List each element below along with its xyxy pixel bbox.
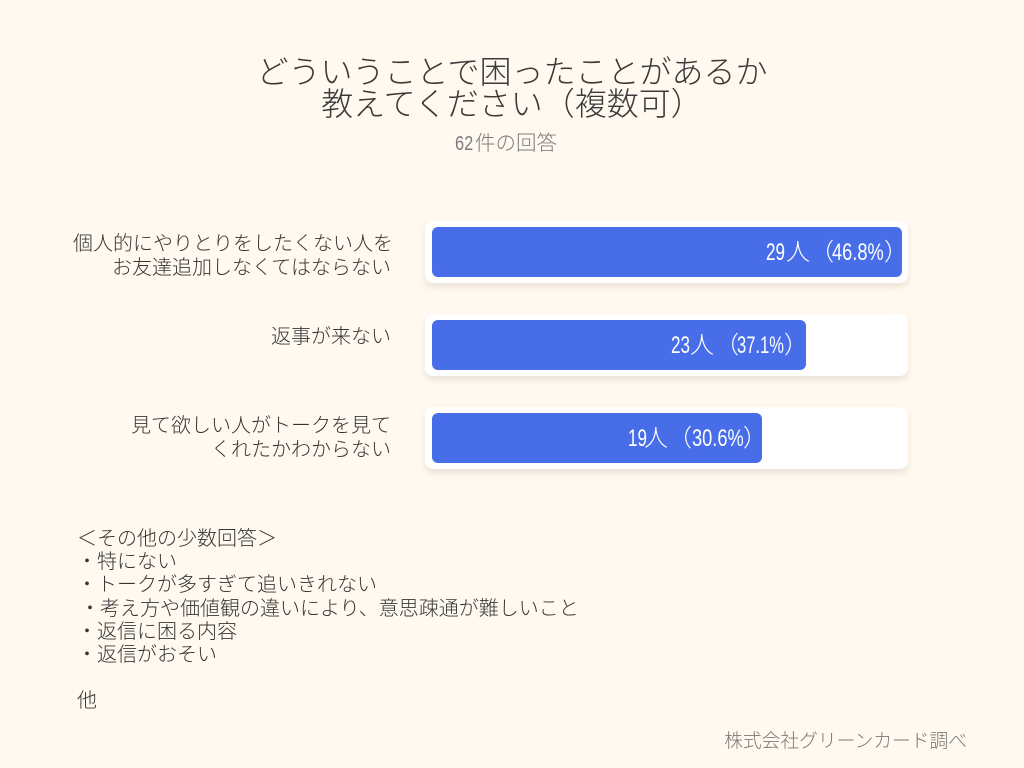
label: row 1: お友達追加しなくてはならない xyxy=(112,257,391,279)
title: 教えてください（複数可） xyxy=(321,86,703,122)
other minority answers: ・トークが多すぎて追いきれない xyxy=(77,574,377,596)
value: 19 people, 30.6% xyxy=(628,425,762,452)
bar: 30.6% xyxy=(432,413,762,463)
response count: 件の回答 xyxy=(475,132,557,155)
other minority answers: ・返信に困る内容 xyxy=(77,621,237,643)
value: 23 people, 37.1% xyxy=(671,332,806,359)
value: 19 people, 30.6%: 19 xyxy=(628,425,647,452)
other minority answers: ・特にない xyxy=(77,551,177,573)
value: 19 people, 30.6%: （ xyxy=(668,425,692,452)
bar: 37.1% xyxy=(432,320,806,370)
other minority answers: ＜その他の少数回答＞ xyxy=(77,528,277,550)
source note: 株式会社グリーンカード調べ xyxy=(724,730,967,751)
label: row 2: 返事が来ない xyxy=(271,326,391,348)
other minority answers: ・返信がおそい xyxy=(77,644,217,666)
bar chart xyxy=(73,221,910,474)
value: 23 people, 37.1%: 人 xyxy=(690,332,714,359)
value: 23 people, 37.1%: 37.1% xyxy=(737,332,784,359)
other minority answers: 他 xyxy=(77,690,97,712)
bar: 46.8% xyxy=(432,227,902,277)
label: row 3 xyxy=(131,415,391,461)
value: 23 people, 37.1%: （ xyxy=(715,332,739,359)
other minority answers xyxy=(77,528,579,712)
other minority answers: ・考え方や価値観の違いにより、意思疎通が難しいこと xyxy=(80,598,579,620)
label: row 3: 見て欲しい人がトークを見て xyxy=(131,415,391,437)
value: 29 people, 46.8%: 人 xyxy=(786,239,810,266)
title xyxy=(256,54,768,122)
response count: 62 xyxy=(455,132,473,155)
value: 29 people, 46.8%: （ xyxy=(810,239,834,266)
label: row 3: くれたかわからない xyxy=(211,439,391,461)
value: 29 people, 46.8% xyxy=(766,239,902,266)
label: row 1 xyxy=(73,233,393,279)
label: row 1: 個人的にやりとりをしたくない人を xyxy=(73,233,393,255)
value: 29 people, 46.8%: 46.8% xyxy=(832,239,884,266)
value: 19 people, 30.6%: 人 xyxy=(644,425,668,452)
value: 19 people, 30.6%: 30.6% xyxy=(692,425,744,452)
title: どういうことで困ったことがあるか xyxy=(256,54,768,90)
bar row 3 xyxy=(425,407,908,469)
value: 29 people, 46.8%: 29 xyxy=(766,239,785,266)
value: 23 people, 37.1%: 23 xyxy=(671,332,690,359)
bar row 2 xyxy=(425,314,908,376)
bar row 1 xyxy=(425,221,908,283)
